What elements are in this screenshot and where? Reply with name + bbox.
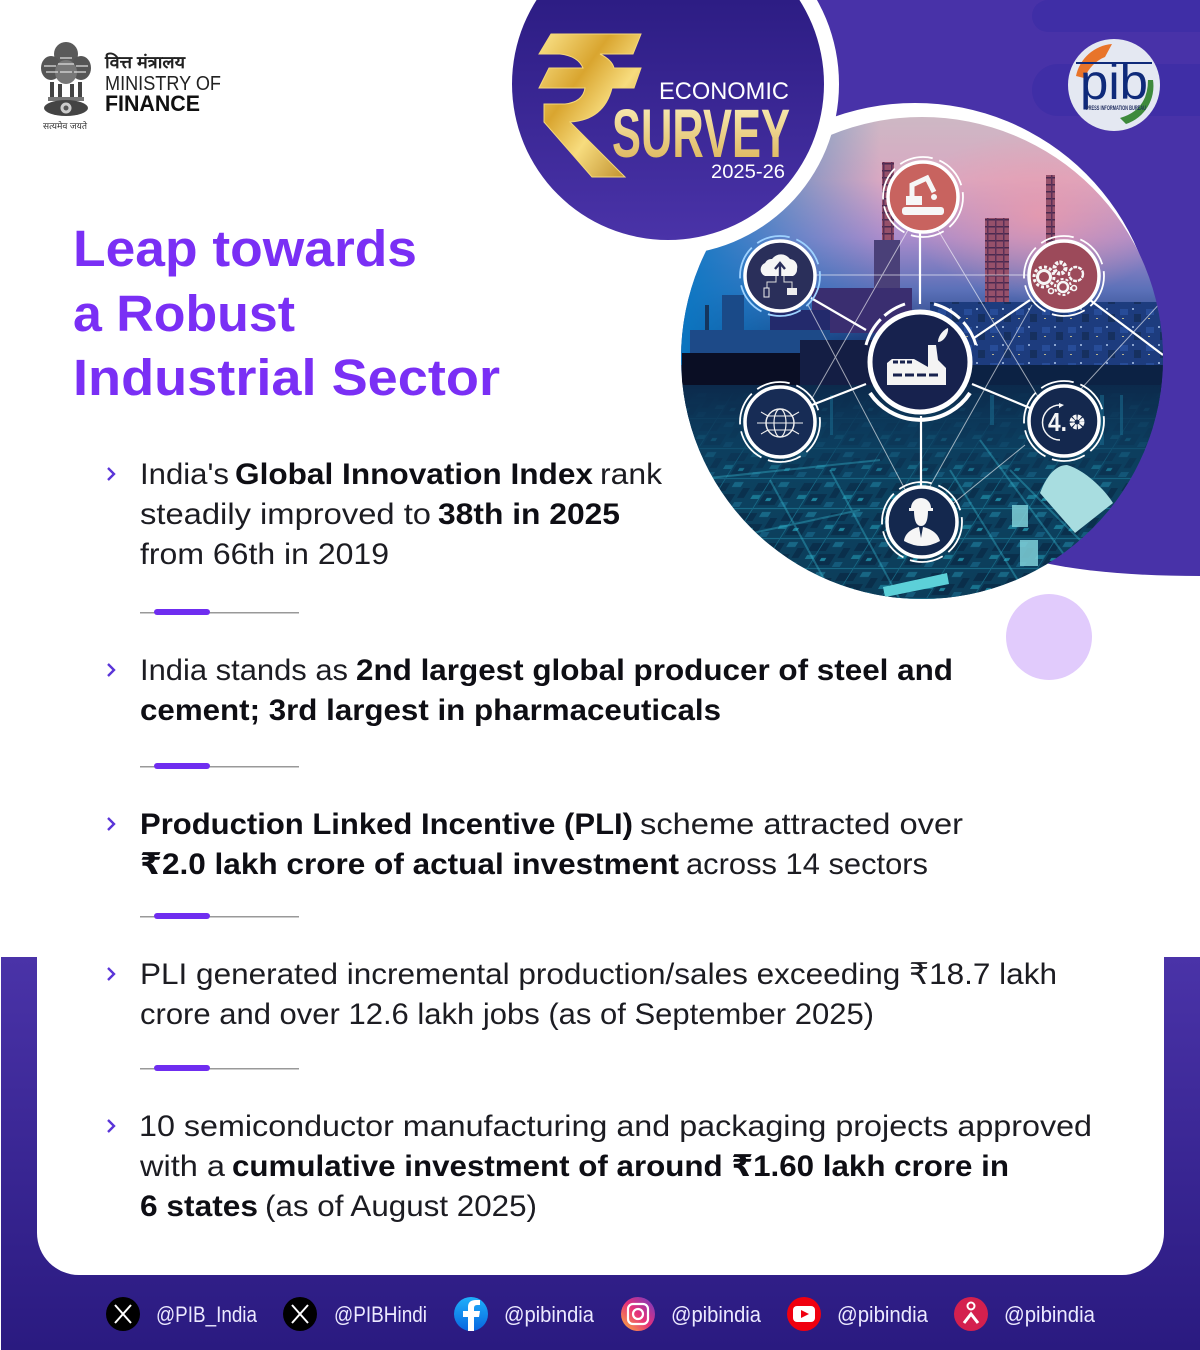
logo: ministry of finance — [41, 42, 221, 131]
bullet 1: global innovation index: India's — [140, 458, 229, 491]
bullet 5: semiconductor projects: 10 semiconductor manufacturing and packaging projects approved — [139, 1110, 1092, 1143]
bullet 1: global innovation index: from 66th in 2019 — [140, 538, 389, 571]
social: instagram: @pibindia — [671, 1302, 762, 1327]
bullet 3: PLI investment — [108, 808, 963, 881]
bullet 1: global innovation index: 38th in 2025 — [438, 498, 620, 531]
chevron — [108, 1120, 114, 1132]
social: instagram — [621, 1297, 762, 1331]
social: facebook: @pibindia — [504, 1302, 595, 1327]
water reflections — [830, 395, 1123, 445]
dome — [1040, 465, 1113, 533]
bullet 3: PLI investment: scheme attracted over — [640, 808, 963, 841]
title: a Robust — [73, 285, 295, 342]
node: industry 4.0 — [1024, 381, 1104, 461]
node: gears — [1024, 236, 1104, 316]
bullet 4: PLI production and jobs — [108, 958, 1057, 1031]
panel: white halo behind photo — [673, 103, 1157, 587]
node: globe — [740, 382, 820, 462]
bullet 5: semiconductor projects — [108, 1110, 1092, 1223]
node: worker — [882, 482, 962, 562]
logo: press information bureau: PRESS INFORMATION BUREAU — [1086, 106, 1146, 112]
panel: white ring around survey badge — [497, 0, 839, 255]
social: koo style — [954, 1297, 1096, 1331]
bullet 1: global innovation index: Global Innovation Index — [235, 458, 593, 491]
title: Leap towards — [73, 220, 417, 277]
water fade — [682, 385, 1162, 478]
logo: press information bureau — [1068, 39, 1160, 131]
network links — [800, 230, 1163, 510]
icon: gold rupee — [539, 34, 641, 177]
bullet 2: steel cement pharma — [108, 654, 953, 727]
social: youtube — [787, 1297, 929, 1331]
panel: lower purple frame — [1, 957, 1200, 1350]
node: industry 4.0: 4. — [1048, 407, 1067, 437]
chevron — [108, 468, 114, 480]
social: facebook — [454, 1297, 595, 1331]
badge label: economic: ECONOMIC — [659, 78, 789, 105]
footer: social handles — [106, 1297, 1096, 1331]
icon: national emblem — [41, 42, 91, 116]
bullet 5: semiconductor projects: with a — [139, 1150, 225, 1183]
bullet 1: global innovation index — [108, 458, 663, 571]
bullet 4: PLI production and jobs: crore and over 12.6 lakh jobs (as of September 2025) — [140, 998, 874, 1031]
ministry name: MINISTRY OF — [105, 73, 221, 95]
decorative lavender circle — [1006, 594, 1092, 680]
node: cloud network — [740, 236, 820, 316]
bullet 1: global innovation index: steadily improved to — [140, 498, 431, 531]
bullet 5: semiconductor projects: cumulative investment of around ₹1.60 lakh crore in — [232, 1150, 1009, 1183]
ministry name hindi: वित्त मंत्रालय — [104, 52, 186, 72]
title — [73, 220, 500, 406]
node: robot arm — [883, 157, 963, 237]
social: X PIB Hindi — [283, 1297, 427, 1331]
bullet 3: PLI investment: ₹2.0 lakh crore of actual investment — [140, 848, 679, 881]
social: X PIB India — [106, 1297, 258, 1331]
chevron — [108, 818, 114, 830]
photo: industrial network circle — [680, 115, 1170, 605]
logo: press information bureau: pib — [1080, 54, 1148, 110]
bullet 5: semiconductor projects: (as of August 2025) — [265, 1190, 537, 1223]
bullet 3: PLI investment: Production Linked Incentive (PLI) — [140, 808, 633, 841]
bullet 2: steel cement pharma: 2nd largest global producer of steel and — [356, 654, 953, 687]
social: youtube: @pibindia — [837, 1302, 929, 1327]
social: koo style: @pibindia — [1004, 1302, 1096, 1327]
bullet 3: PLI investment: across 14 sectors — [686, 848, 928, 881]
bullet 4: PLI production and jobs: PLI generated incremental production/sales exceeding ₹18.7 lakh — [140, 958, 1057, 991]
social: X PIB India: @PIB_India — [156, 1302, 258, 1327]
skyline silhouettes — [682, 162, 1163, 393]
bullet 1: global innovation index: rank — [600, 458, 663, 491]
badge label: year: 2025-26 — [711, 162, 785, 183]
bullet 5: semiconductor projects: 6 states — [140, 1190, 258, 1223]
chevron — [108, 968, 114, 980]
emblem motto: सत्यमेव जयते — [43, 120, 88, 131]
chevron — [108, 664, 114, 676]
badge label: survey: SURVEY — [612, 95, 790, 172]
badge: economic survey — [512, 0, 824, 240]
social: X PIB Hindi: @PIBHindi — [334, 1302, 427, 1327]
logo: ministry of finance: FINANCE — [105, 91, 200, 116]
circuit ground pattern — [682, 393, 1163, 600]
bullet 2: steel cement pharma: India stands as — [140, 654, 348, 687]
bullet 2: steel cement pharma: cement; 3rd largest in pharmaceuticals — [140, 694, 721, 727]
node: factory centre — [866, 304, 976, 420]
panel: top right purple backdrop — [800, 0, 1200, 576]
title: Industrial Sector — [73, 349, 500, 406]
